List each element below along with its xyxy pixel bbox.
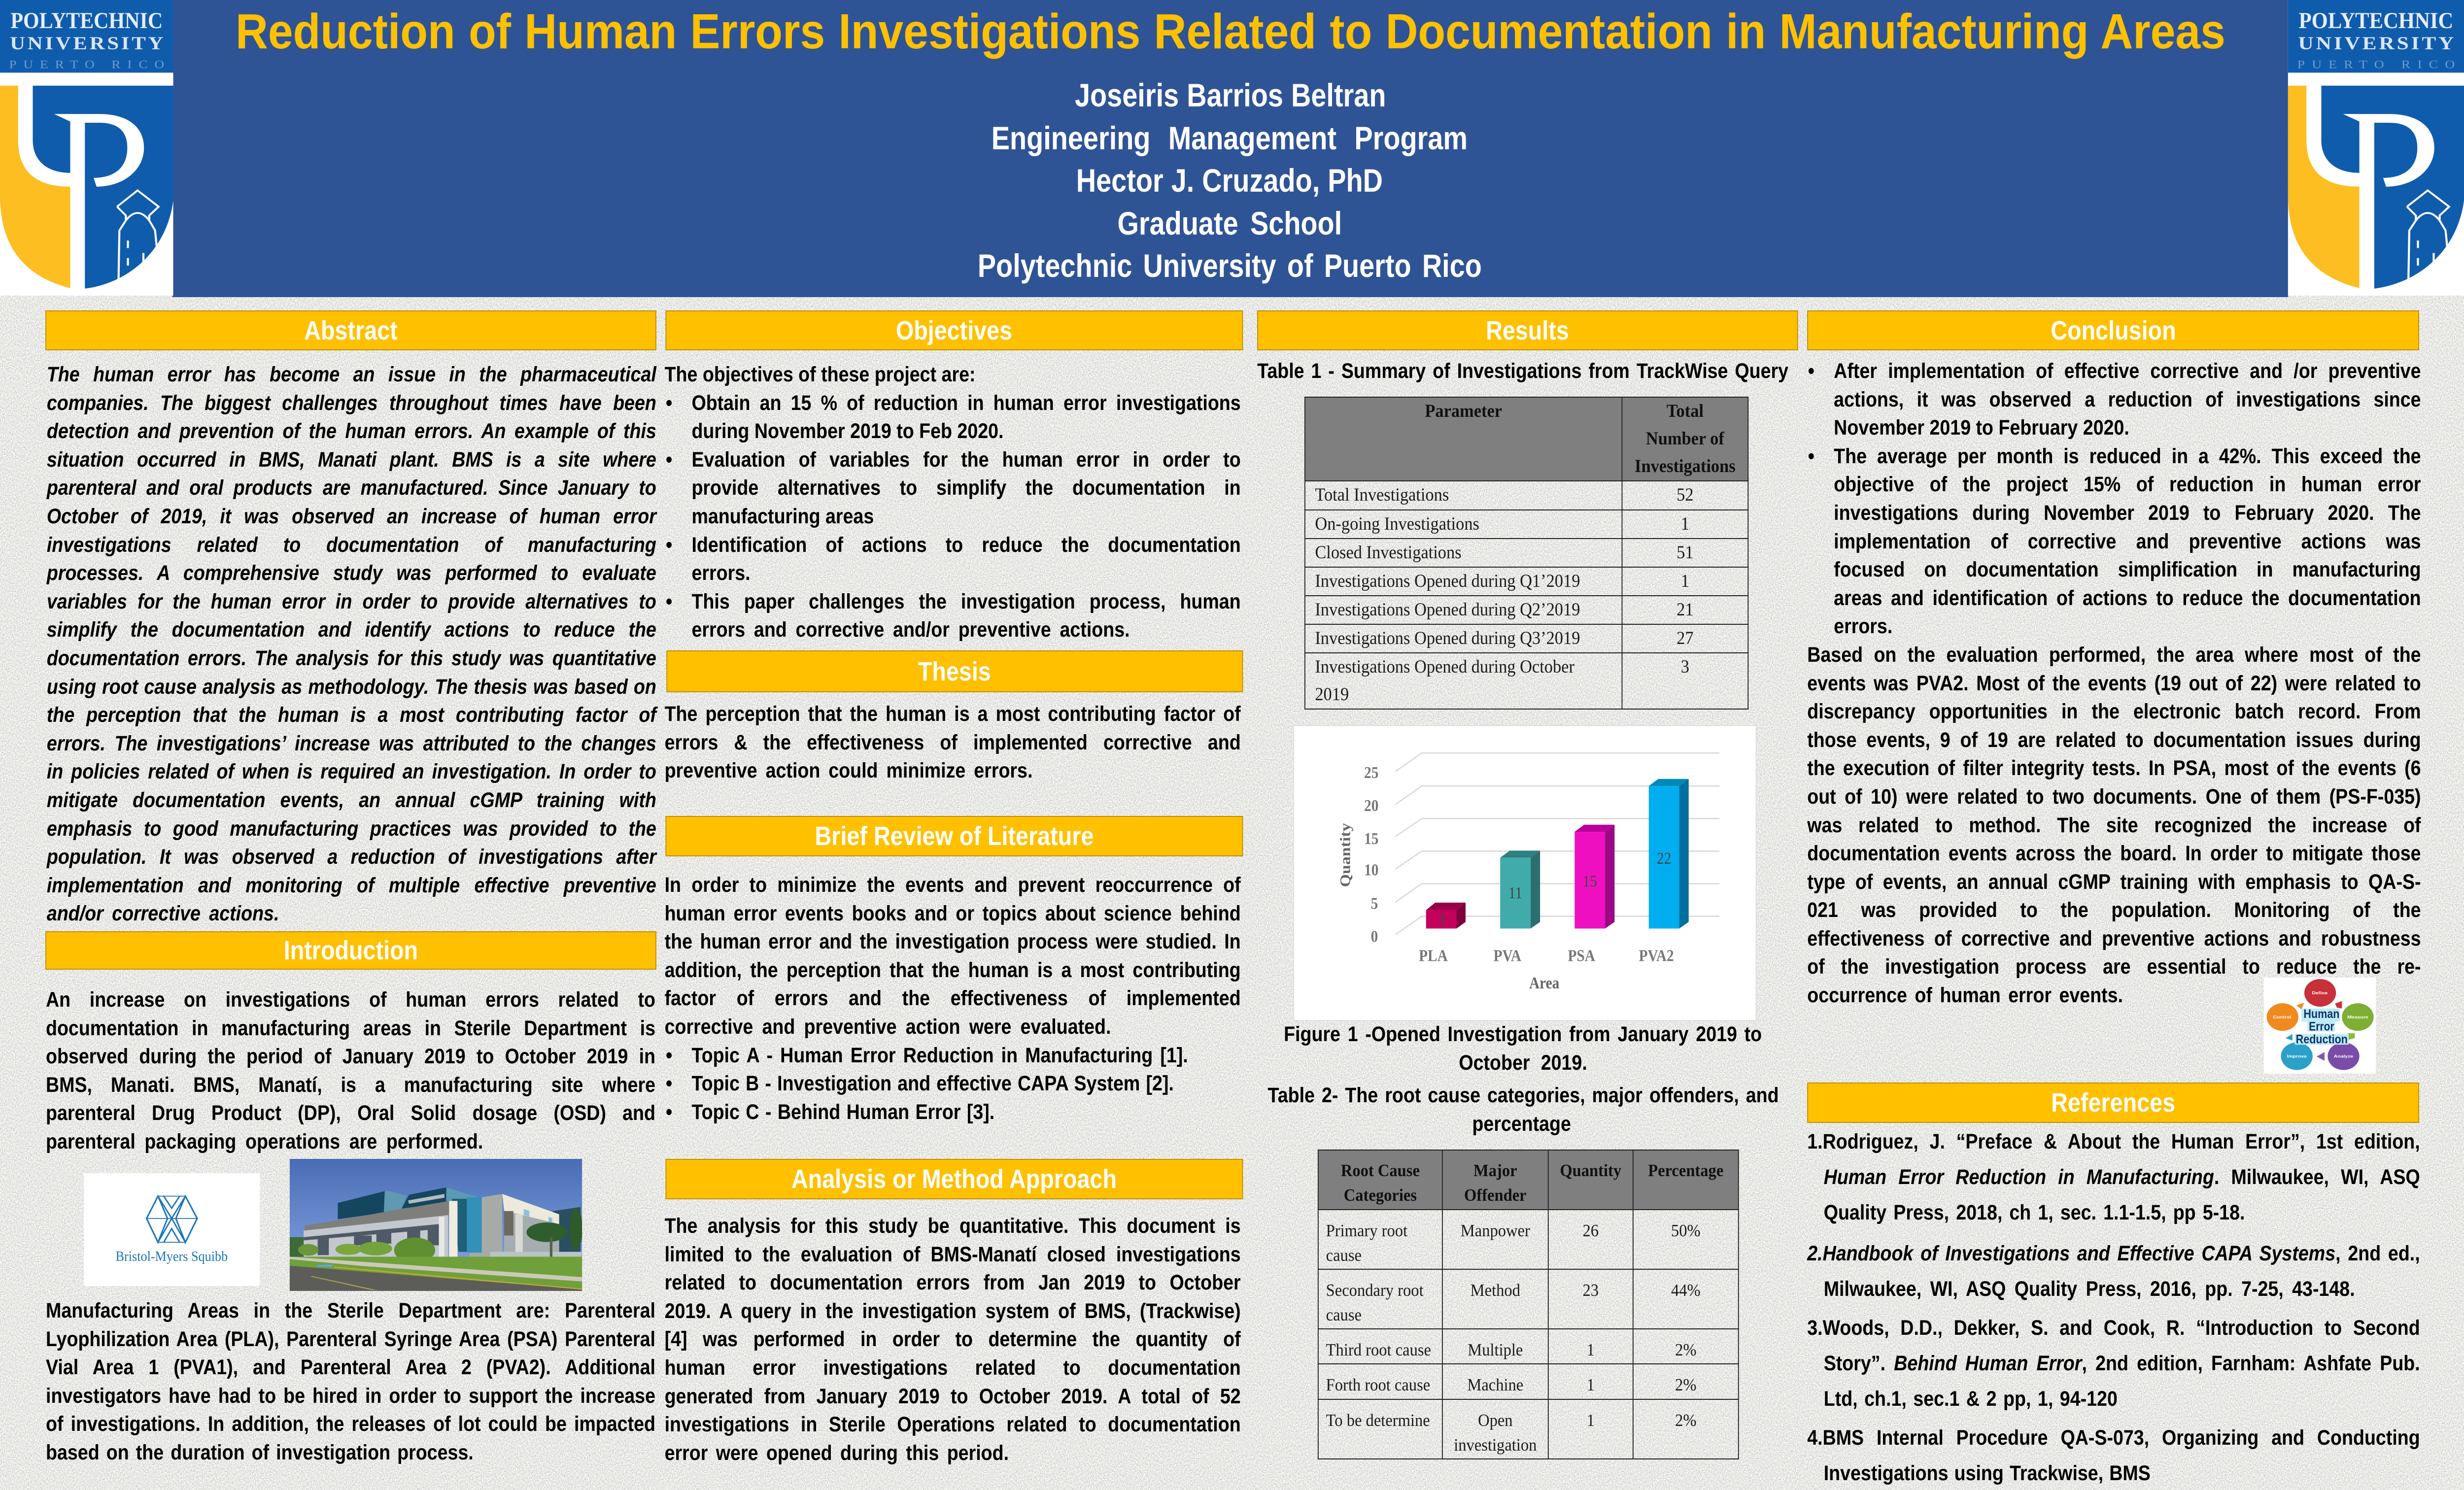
abstract text: documentation errors. The analysis for this study was quantitative <box>47 646 656 670</box>
table 2: root cause categories: Percentage <box>1648 1161 1723 1180</box>
diagram: human error reduction cycle: Error <box>2309 1019 2334 1033</box>
heading: brief review of literature <box>665 816 1243 856</box>
conclusion text: 021 was provided to the population. Monitoring of the <box>1807 898 2421 922</box>
abstract text: situation occurred in BMS, Manati plant. BMS is a site where <box>47 448 656 472</box>
bar: PSA <box>1574 825 1614 928</box>
table 2: root cause categories: Offender <box>1464 1185 1527 1205</box>
analysis text: limited to the evaluation of BMS-Manatí closed investigations <box>665 1243 1241 1266</box>
caption: figure 1 <box>1284 1020 1762 1077</box>
literature text: • <box>666 1044 672 1067</box>
circle: control: Control <box>2273 1015 2291 1020</box>
table 2: root cause categories: cause <box>1326 1305 1362 1324</box>
table 2: root cause categories: 44% <box>1671 1281 1701 1300</box>
objectives text: Evaluation of variables for the human error in order to <box>691 448 1241 472</box>
table 1: summary of investigations: Investigations Opened during Q1’2019 <box>1315 571 1580 591</box>
panel: abstract <box>45 310 656 921</box>
logo: Polytechnic University right: UNIVERSITY <box>2298 33 2454 53</box>
conclusion text: areas and identification of actions to reduce the documentation <box>1834 586 2421 610</box>
objectives text: • <box>666 391 672 415</box>
heading: references: References <box>2051 1088 2175 1118</box>
analysis text: [4] was performed in order to determine the quantity of <box>665 1327 1241 1351</box>
bar: PLA <box>1426 903 1466 928</box>
table 2: root cause categories: 1 <box>1587 1340 1595 1359</box>
diagram: human error reduction cycle <box>2264 978 2376 1074</box>
table 1: summary of investigations: Investigations Opened during Q3’2019 <box>1315 628 1580 648</box>
analysis text <box>665 1212 1241 1467</box>
table 1: summary of investigations: Investigations Opened during October <box>1315 657 1574 677</box>
caption: figure 1: Figure 1 -Opened Investigation from January 2019 to <box>1284 1022 1762 1046</box>
circle: improve <box>2281 1043 2313 1070</box>
bar chart: opened investigations by area: 15 <box>1364 829 1378 848</box>
bar chart: opened investigations by area: 10 <box>1364 860 1378 879</box>
objectives text: • <box>666 533 672 557</box>
reference list: 1.Rodriguez, J. “Preface & About the Human Error”, 1st edition, <box>1807 1130 2420 1153</box>
abstract text: mitigate documentation events, an annual cGMP training with <box>47 788 656 812</box>
heading: results: Results <box>1486 315 1569 345</box>
heading: results <box>1257 310 1798 350</box>
conclusion text: actions, it was observed a reduction of investigations since <box>1834 388 2421 411</box>
authors and affiliation <box>978 77 1482 284</box>
table 2: root cause categories: 2% <box>1675 1340 1696 1359</box>
objectives text: provide alternatives to simplify the documentation in <box>691 476 1241 500</box>
panel: introduction <box>45 931 656 1473</box>
abstract text: using root cause analysis as methodology. The thesis was based on <box>47 675 656 699</box>
heading: abstract: Abstract <box>304 315 398 345</box>
bar chart: opened investigations by area: PVA <box>1494 947 1521 965</box>
reference list: Quality Press, 2018, ch 1, sec. 1.1-1.5, pp 5-18. <box>1824 1201 2245 1224</box>
objectives text: during November 2019 to Feb 2020. <box>691 419 1003 443</box>
manufacturing areas text: Vial Area 1 (PVA1), and Parenteral Area 2 (PVA2). Additional <box>46 1355 655 1379</box>
logo: Polytechnic University right <box>2288 0 2464 296</box>
circle: define: Define <box>2312 991 2327 996</box>
introduction text: BMS, Manati. BMS, Manatí, is a manufacturing site where <box>46 1073 655 1097</box>
analysis text: human error investigations related to documentation <box>665 1356 1241 1380</box>
logo: Polytechnic University right: PUERTO RICO <box>2297 58 2455 71</box>
conclusion text: errors. <box>1834 614 1892 638</box>
table 1: summary of investigations: Total Investigations <box>1315 485 1449 505</box>
bar: PVA2 <box>1649 779 1689 928</box>
heading: conclusion <box>1807 310 2419 350</box>
abstract text: errors. The investigations’ increase was attributed to the changes <box>47 732 656 755</box>
panel: brief review of literature <box>665 816 1243 1126</box>
conclusion text: of the investigation process are essential to reduce the re- <box>1807 955 2421 979</box>
conclusion text: November 2019 to February 2020. <box>1834 416 2129 440</box>
conclusion text: out of 10) were related to two documents. One of them (PS-F-035) <box>1807 785 2421 809</box>
diagram: human error reduction cycle: Reduction <box>2296 1032 2348 1046</box>
abstract text <box>47 361 656 928</box>
abstract text: The human error has become an issue in the pharmaceutical <box>47 363 656 386</box>
thesis text: preventive action could minimize errors. <box>665 759 1032 782</box>
manufacturing areas text <box>46 1297 655 1467</box>
thesis text <box>665 700 1241 785</box>
reference list: Ltd, ch.1, sec.1 & 2 pp, 1, 94-120 <box>1824 1387 2118 1411</box>
introduction text: documentation in manufacturing areas in Sterile Department is <box>46 1016 655 1040</box>
abstract text: variables for the human error in order to provide alternatives to <box>47 590 656 613</box>
objectives text: errors. <box>691 561 751 585</box>
table 2: root cause categories: cause <box>1326 1246 1362 1265</box>
bar chart: opened investigations by area: 15 <box>1583 872 1597 890</box>
table 2: root cause categories: To be determine <box>1326 1411 1430 1430</box>
conclusion text: • <box>1808 359 1814 383</box>
objectives text: The objectives of these project are: <box>665 363 976 386</box>
table 1: summary of investigations: Parameter <box>1425 401 1502 421</box>
caption: table 2: percentage <box>1472 1112 1571 1136</box>
conclusion text: type of events, an annual cGMP training with emphasis to QA-S- <box>1807 870 2421 894</box>
table 1: summary of investigations: 51 <box>1677 542 1694 563</box>
literature text: addition, the perception that the human is a most contributing <box>665 958 1241 982</box>
table 2: root cause categories: Forth root cause <box>1326 1375 1430 1394</box>
reference list: Milwaukee, WI, ASQ Quality Press, 2016, pp. 7-25, 43-148. <box>1824 1277 2355 1301</box>
abstract text: investigations related to documentation of manufacturing <box>47 533 656 557</box>
conclusion text: focused on documentation simplification in manufacturing <box>1834 558 2421 581</box>
table 2: root cause categories: Quantity <box>1560 1161 1621 1180</box>
conclusion text: documentation events across the board. In order to mitigate those <box>1807 842 2421 865</box>
table 1: summary of investigations <box>1304 397 1748 710</box>
literature text: factor of errors and the effectiveness of implemented <box>665 986 1241 1010</box>
table 2: root cause categories: Manpower <box>1461 1221 1530 1240</box>
manufacturing areas text: investigators have had to be hired in order to support the increase <box>46 1384 655 1408</box>
abstract text: October of 2019, it was observed an increase of human error <box>47 505 656 528</box>
table 2: root cause categories: investigation <box>1454 1435 1537 1455</box>
bar chart: opened investigations by area: PSA <box>1568 947 1595 965</box>
conclusion text: discrepancy opportunities in the electronic batch record. From <box>1807 700 2421 723</box>
logo: Polytechnic University left: PUERTO RICO <box>9 58 164 71</box>
table 1: summary of investigations: Investigations <box>1635 456 1736 476</box>
table 2: root cause categories: Third root cause <box>1326 1340 1431 1359</box>
circle: analyze: Analyze <box>2334 1054 2353 1059</box>
heading: objectives <box>665 310 1243 350</box>
authors and affiliation: Joseiris Barrios Beltran <box>1075 77 1386 113</box>
heading: thesis <box>666 650 1243 692</box>
conclusion text: was related to method. The site recognized the increase of <box>1807 813 2421 837</box>
literature text <box>665 871 1241 1126</box>
abstract text: the perception that the human is a most contributing factor of <box>47 703 656 727</box>
abstract text: emphasis to good manufacturing practices was provided to the <box>47 817 656 841</box>
table 2: root cause categories: 50% <box>1671 1221 1701 1240</box>
logo: Bristol-Myers Squibb <box>84 1173 260 1286</box>
header background <box>172 0 2288 297</box>
caption: table 1: Table 1 - Summary of Investigations from TrackWise Query <box>1257 359 1788 383</box>
heading: abstract <box>45 310 656 350</box>
heading: conclusion: Conclusion <box>2051 315 2176 345</box>
table 2: root cause categories: Machine <box>1467 1375 1523 1394</box>
objectives text <box>665 361 1241 644</box>
manufacturing areas text: based on the duration of investigation process. <box>46 1441 474 1464</box>
table 2: root cause categories: Method <box>1471 1281 1520 1300</box>
table 1: summary of investigations: On-going Investigations <box>1315 514 1479 534</box>
reference list: 4.BMS Internal Procedure QA-S-073, Organizing and Conducting <box>1807 1426 2420 1450</box>
circle: improve: Improve <box>2287 1054 2307 1059</box>
circle: analyze <box>2327 1043 2360 1070</box>
diagram: human error reduction cycle: Human <box>2303 1007 2339 1020</box>
table 2: root cause categories: Root Cause <box>1341 1161 1420 1180</box>
abstract text: processes. A comprehensive study was performed to evaluate <box>47 561 656 585</box>
logo: Polytechnic University left <box>0 0 173 296</box>
reference list: Investigations using Trackwise, BMS <box>1824 1461 2151 1485</box>
conclusion text: effectiveness of corrective and preventive actions and robustness <box>1807 927 2421 950</box>
table 2: root cause categories: Multiple <box>1468 1340 1523 1359</box>
abstract text: and/or corrective actions. <box>47 902 279 925</box>
literature text: In order to minimize the events and prevent reoccurrence of <box>665 873 1241 897</box>
bar chart: opened investigations by area: 5 <box>1371 894 1378 913</box>
introduction text: parenteral Drug Product (DP), Oral Solid dosage (OSD) and <box>46 1101 655 1125</box>
bar chart: opened investigations by area: 22 <box>1657 849 1671 868</box>
conclusion text <box>1807 357 2421 1010</box>
table 2: root cause categories: Secondary root <box>1326 1281 1424 1300</box>
table 2: root cause categories <box>1318 1150 1739 1459</box>
thesis text: The perception that the human is a most contributing factor of <box>665 702 1241 726</box>
caption: table 2: Table 2- The root cause categories, major offenders, and <box>1268 1084 1779 1107</box>
table 2: root cause categories: Categories <box>1344 1185 1417 1205</box>
table 1: summary of investigations: Closed Investigations <box>1315 542 1462 563</box>
heading: analysis or method approach: Analysis or Method Approach <box>791 1164 1117 1194</box>
bar chart: opened investigations by area <box>1294 725 1756 1021</box>
panel: conclusion <box>1807 310 2421 1074</box>
table 1: summary of investigations: 1 <box>1681 571 1689 591</box>
bar chart: opened investigations by area: 3 <box>1438 910 1445 928</box>
analysis text: 2019. A query in the investigation system of BMS, (Trackwise) <box>665 1299 1241 1323</box>
reference list: Human Error Reduction in Manufacturing. Milwaukee, WI, ASQ <box>1824 1165 2420 1189</box>
literature text: • <box>666 1100 672 1124</box>
header banner <box>0 0 2464 297</box>
circle: define <box>2304 979 2336 1007</box>
authors and affiliation: Graduate School <box>1117 205 1342 241</box>
analysis text: The analysis for this study be quantitative. This document is <box>665 1214 1241 1238</box>
abstract text: simplify the documentation and identify actions to reduce the <box>47 618 656 642</box>
objectives text: • <box>666 590 672 613</box>
conclusion text: The average per month is reduced in a 42%. This exceed the <box>1834 444 2421 468</box>
heading: analysis or method approach <box>665 1159 1243 1199</box>
table 2: root cause categories: 1 <box>1587 1411 1595 1430</box>
table 1: summary of investigations: 21 <box>1677 600 1694 620</box>
literature text: the human error and the investigation process were studied. In <box>665 930 1241 953</box>
table 2: root cause categories: 26 <box>1582 1221 1599 1240</box>
introduction text: observed during the period of January 2019 to October 2019 in <box>46 1045 655 1068</box>
panel: analysis or method approach <box>665 1159 1243 1474</box>
table 1: summary of investigations: 1 <box>1681 514 1689 534</box>
thesis text: errors & the effectiveness of implemented corrective and <box>665 731 1241 754</box>
objectives text: Identification of actions to reduce the documentation <box>691 533 1241 557</box>
table 2: root cause categories: 2% <box>1675 1375 1696 1394</box>
literature text: • <box>666 1072 672 1095</box>
reference list: 3.Woods, D.D., Dekker, S. and Cook, R. “Introduction to Second <box>1807 1316 2420 1340</box>
authors and affiliation: Engineering Management Program <box>992 119 1468 156</box>
manufacturing areas text: of investigations. In addition, the releases of lot could be impacted <box>46 1412 655 1436</box>
heading: brief review of literature: Brief Review of Literature <box>815 821 1094 851</box>
panel: references <box>1807 1083 2421 1490</box>
objectives text: errors and corrective and/or preventive actions. <box>691 618 1130 642</box>
objectives text: • <box>666 448 672 472</box>
table 2: root cause categories: 1 <box>1587 1375 1595 1394</box>
conclusion text: Based on the evaluation performed, the area where most of the <box>1807 643 2421 667</box>
table 1: summary of investigations: 27 <box>1677 628 1694 648</box>
analysis text: error were opened during this period. <box>665 1441 1009 1465</box>
table 2: root cause categories: Open <box>1478 1411 1513 1430</box>
conclusion text: those events, 9 of 19 are related to documentation issues during <box>1807 728 2421 752</box>
reference list <box>1807 1124 2421 1490</box>
objectives text: manufacturing areas <box>691 505 874 528</box>
heading: references <box>1807 1083 2419 1123</box>
analysis text: generated from January 2019 to October 2019. A total of 52 <box>665 1385 1241 1408</box>
bar chart: opened investigations by area: 25 <box>1364 763 1378 782</box>
table 1: summary of investigations: 3 <box>1681 657 1689 677</box>
authors and affiliation: Hector J. Cruzado, PhD <box>1076 162 1383 199</box>
table 1: summary of investigations: Investigations Opened during Q2’2019 <box>1315 600 1580 620</box>
table 2: root cause categories: 23 <box>1582 1281 1599 1300</box>
abstract text: population. It was observed a reduction of investigations after <box>47 845 656 869</box>
table 2: root cause categories: Major <box>1473 1161 1517 1180</box>
circle: measure: Measure <box>2347 1015 2368 1020</box>
circle: measure <box>2342 1003 2374 1031</box>
bar chart: opened investigations by area: 20 <box>1364 796 1378 815</box>
table 1: summary of investigations: 2019 <box>1315 684 1349 705</box>
heading: introduction <box>45 931 656 970</box>
table 1: summary of investigations: 52 <box>1677 485 1694 505</box>
bar chart: opened investigations by area: PVA2 <box>1639 947 1674 965</box>
bar chart: opened investigations by area: 0 <box>1371 927 1378 946</box>
table 1: summary of investigations: Number of <box>1646 429 1724 449</box>
title: Reduction of Human Errors Investigations Related to Documentation in Manufacturing Areas <box>236 4 2225 59</box>
table 2: root cause categories: Primary root <box>1326 1221 1407 1240</box>
circle: control <box>2267 1003 2298 1031</box>
literature text: Topic B - Investigation and effective CAPA System [2]. <box>691 1072 1174 1095</box>
literature text: corrective and preventive action were evaluated. <box>665 1015 1111 1039</box>
introduction text <box>46 986 655 1156</box>
literature text: human error events books and or topics about science behind <box>665 902 1241 925</box>
manufacturing areas text: Lyophilization Area (PLA), Parenteral Syringe Area (PSA) Parenteral <box>46 1327 655 1351</box>
caption: table 2 <box>1268 1082 1779 1138</box>
table 1: summary of investigations: Total <box>1667 401 1704 421</box>
caption: figure 1: October 2019. <box>1459 1051 1587 1075</box>
abstract text: companies. The biggest challenges throughout times have been <box>47 391 656 415</box>
heading: thesis: Thesis <box>918 656 991 686</box>
conclusion text: objective of the project 15% of reduction in human error <box>1834 473 2421 496</box>
bar chart: opened investigations by area: 11 <box>1508 883 1522 902</box>
conclusion text: After implementation of effective corrective and /or preventive <box>1834 359 2421 383</box>
conclusion text: investigations during November 2019 to February 2020. The <box>1834 501 2421 525</box>
conclusion text: occurrence of human error events. <box>1807 983 2123 1007</box>
panel: thesis <box>665 650 1243 786</box>
abstract text: in policies related of when is required an investigation. In order to <box>47 760 656 783</box>
heading: objectives: Objectives <box>896 315 1013 345</box>
panel: results <box>1257 310 1798 1461</box>
introduction text: parenteral packaging operations are performed. <box>46 1130 483 1153</box>
panel: objectives <box>665 310 1243 645</box>
authors and affiliation: Polytechnic University of Puerto Rico <box>978 247 1482 284</box>
conclusion text: events was PVA2. Most of the events (19 out of 22) were related to <box>1807 672 2421 695</box>
conclusion text: the execution of filter integrity tests. In PSA, most of the events (6 <box>1807 756 2421 780</box>
conclusion text: implementation of corrective and preventive actions was <box>1834 530 2421 553</box>
analysis text: related to documentation errors from Jan 2019 to October <box>665 1271 1241 1294</box>
logo: Polytechnic University left: UNIVERSITY <box>10 34 163 53</box>
reference list: Story”. Behind Human Error, 2nd edition, Farnham: Ashfate Pub. <box>1824 1352 2420 1375</box>
abstract text: parenteral and oral products are manufactured. Since January to <box>47 476 656 500</box>
bar chart: opened investigations by area: PLA <box>1419 947 1448 965</box>
heading: introduction: Introduction <box>284 936 418 965</box>
introduction text: An increase on investigations of human errors related to <box>46 988 655 1012</box>
abstract text: implementation and monitoring of multiple effective preventive <box>47 874 656 897</box>
reference list: 2.Handbook of Investigations and Effective CAPA Systems, 2nd ed., <box>1807 1242 2420 1265</box>
conclusion text: • <box>1808 444 1814 468</box>
bar chart: opened investigations by area: Area <box>1529 974 1559 992</box>
literature text: Topic A - Human Error Reduction in Manufacturing [1]. <box>691 1044 1188 1067</box>
objectives text: Obtain an 15 % of reduction in human error investigations <box>691 391 1241 415</box>
literature text: Topic C - Behind Human Error [3]. <box>691 1100 994 1124</box>
bar chart: opened investigations by area: Quantity <box>1337 823 1353 887</box>
table 2: root cause categories: 2% <box>1675 1411 1696 1430</box>
bar: PVA <box>1500 850 1540 928</box>
abstract text: detection and prevention of the human errors. An example of this <box>47 419 656 443</box>
manufacturing areas text: Manufacturing Areas in the Sterile Department are: Parenteral <box>46 1299 655 1322</box>
analysis text: investigations in Sterile Operations related to documentation <box>665 1413 1241 1436</box>
photo: BMS Manatí plant <box>290 1159 582 1291</box>
objectives text: This paper challenges the investigation process, human <box>691 590 1241 613</box>
